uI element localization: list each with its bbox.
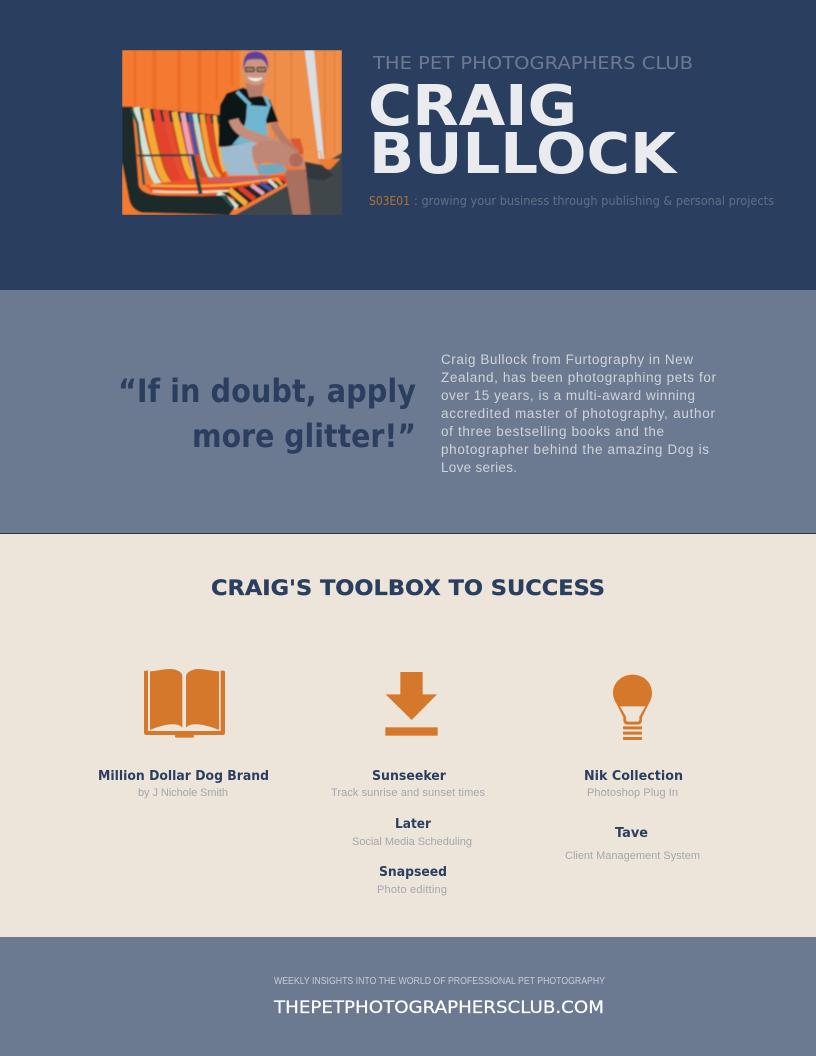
bench back gaps [142, 120, 226, 183]
panel: header [0, 0, 816, 290]
overalls bib [232, 105, 270, 145]
armrest [136, 153, 195, 158]
tool: Tave: Tave [615, 825, 648, 841]
tool: Nik Collection [584, 768, 683, 799]
shorts [220, 141, 259, 175]
bio text: Craig Bullock from Furtography in New [441, 352, 693, 367]
club name: THE PET PHOTOGRAPHERS CLUB [372, 54, 693, 74]
bio text [441, 352, 716, 475]
title: Craig Bullock: BULLOCK [369, 122, 679, 187]
icon: download arrow [385, 672, 438, 736]
photo: Craig sitting on a striped bench [122, 50, 342, 215]
title: Craig Bullock: CRAIG [368, 74, 577, 139]
tool: Sunseeker [331, 768, 486, 799]
toolbox heading: CRAIG'S TOOLBOX TO SUCCESS [211, 576, 605, 601]
bio text: of three bestselling books and the [441, 424, 664, 439]
shirt [218, 88, 278, 147]
tool: Sunseeker: Track sunrise and sunset times [331, 787, 486, 799]
panel: footer [0, 937, 816, 1056]
bench back dark top gaps [132, 107, 221, 124]
quote: more glitter!” [192, 417, 416, 455]
tool: Nik Collection: Photoshop Plug In [587, 787, 678, 799]
bio text: Love series. [441, 460, 517, 475]
quote [118, 372, 416, 455]
tool: Snapseed [377, 864, 447, 896]
arms [228, 116, 282, 144]
panel: toolbox [0, 533, 816, 937]
bench back slats [136, 107, 225, 191]
bio text: over 15 years, is a multi-award winning [441, 388, 695, 403]
quote: “If in doubt, apply [118, 372, 416, 410]
tool: Tave [565, 825, 700, 862]
shoe [305, 162, 334, 180]
tool: Later: Social Media Scheduling [352, 836, 472, 848]
bench frame [122, 107, 235, 215]
panel: quote and bio [0, 290, 816, 533]
tool: Million Dollar Dog Brand: Million Dollar Dog Brand [98, 768, 269, 784]
bio text: accredited master of photography, author [441, 406, 716, 421]
tool: Million Dollar Dog Brand [98, 768, 269, 799]
tool: Million Dollar Dog Brand: by J Nichole Smith [138, 787, 228, 799]
tool: Snapseed: Snapseed [379, 864, 447, 880]
tool: Tave: Client Management System [565, 850, 700, 862]
bio text: photographer behind the amazing Dog is [441, 442, 709, 457]
tool: Snapseed: Photo editting [377, 884, 447, 896]
footer website: THEPETPHOTOGRAPHERSCLUB.COM [273, 998, 604, 1018]
far leg [285, 169, 311, 215]
thigh [252, 140, 305, 168]
seat [146, 175, 286, 198]
neck and head [245, 83, 265, 97]
ground [235, 153, 342, 215]
tool: Later [352, 816, 472, 848]
tool: Nik Collection: Nik Collection [584, 768, 683, 784]
footer tagline: WEEKLY INSIGHTS INTO THE WORLD OF PROFESSIONAL PET PHOTOGRAPHY [274, 976, 605, 987]
icon: light bulb [613, 675, 652, 740]
far bench end [290, 138, 305, 155]
episode subtitle: S03E01 [369, 194, 410, 208]
episode subtitle: : growing your business through publishing & personal projects [414, 194, 774, 208]
white wall strip [305, 50, 324, 159]
bio text: Zealand, has been photographing pets for [441, 370, 716, 385]
tool: Later: Later [395, 816, 431, 832]
title: Craig Bullock [368, 74, 679, 187]
tool: Sunseeker: Sunseeker [372, 768, 446, 784]
icon: open book [144, 669, 225, 738]
